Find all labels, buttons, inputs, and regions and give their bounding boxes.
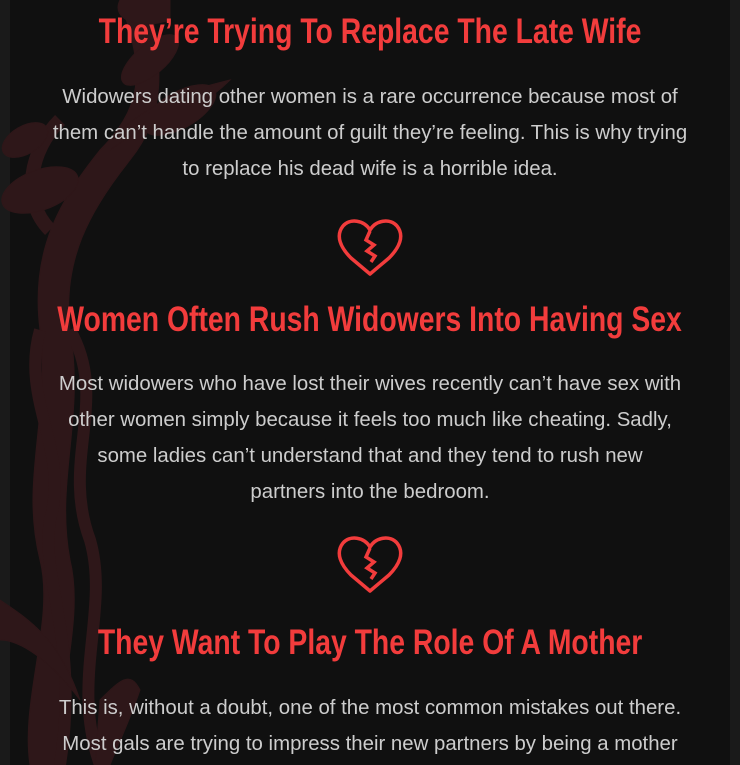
text block 3: This is, without a doubt, one of the most common mistakes out there. [59, 697, 681, 719]
text block 3: Most gals are trying to impress their new partners by being a mother [62, 733, 678, 755]
text block 2: Most widowers who have lost their wives recently can’t have sex with [59, 373, 681, 395]
background vine [0, 0, 232, 765]
text block 2: partners into the bedroom. [250, 481, 490, 503]
text block 3 [59, 697, 681, 755]
heading 3: They Want To Play The Role Of A Mother [98, 623, 642, 662]
text block 2: other women simply because it feels too much like cheating. Sadly, [68, 409, 672, 431]
icon: broken heart 1 [338, 219, 402, 276]
text block 1 [53, 86, 687, 180]
text block 1: them can’t handle the amount of guilt they’re feeling. This is why trying [53, 122, 687, 144]
heading 1: They’re Trying To Replace The Late Wife [99, 12, 641, 51]
heading 2: Women Often Rush Widowers Into Having Sex [58, 300, 682, 339]
icon: broken heart 2 [338, 536, 402, 593]
text block 2: some ladies can’t understand that and they tend to rush new [97, 445, 643, 467]
text block 1: to replace his dead wife is a horrible idea. [182, 158, 558, 180]
text block 1: Widowers dating other women is a rare occurrence because most of [62, 86, 678, 108]
text block 2 [59, 373, 681, 503]
